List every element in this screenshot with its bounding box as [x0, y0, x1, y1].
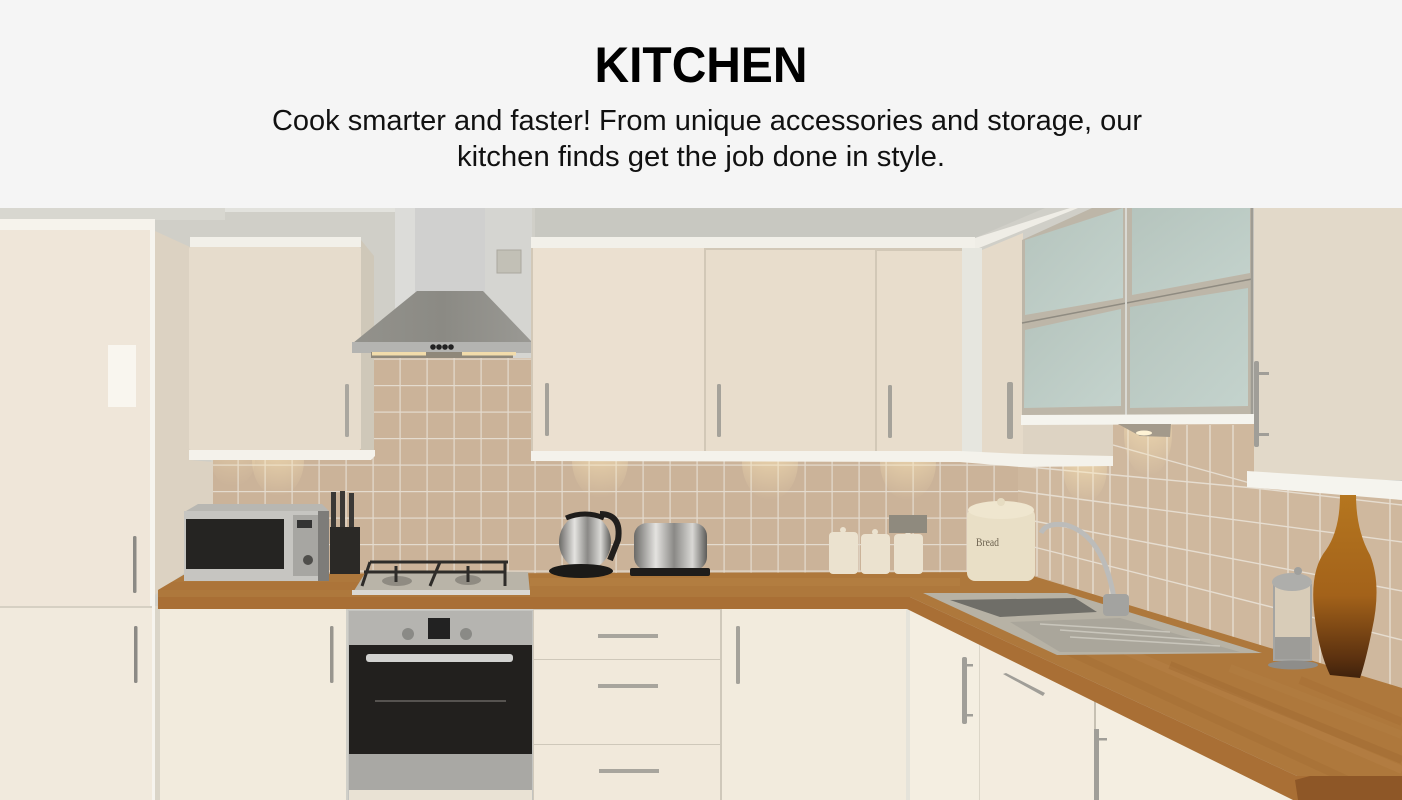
extractor hood: [352, 208, 533, 358]
lower cabinets: [155, 605, 1302, 800]
title: KITCHEN: [594, 37, 808, 93]
gas hob: [352, 562, 530, 595]
back wall tiles: [213, 358, 1023, 576]
oven: [348, 610, 533, 800]
amber vase: [1313, 495, 1377, 678]
header band: [0, 0, 1402, 208]
upper cabinet left: [189, 237, 375, 460]
wall and ceiling: [0, 208, 1402, 800]
subtitle text: [272, 105, 1142, 173]
toaster: [630, 523, 710, 576]
under-cabinet light glows: [211, 392, 1172, 502]
sink: [923, 593, 1262, 655]
countertop: [158, 572, 1402, 800]
bread bin: Bread: [976, 535, 999, 549]
tap: [1041, 524, 1129, 616]
socket on tiles: [889, 515, 927, 533]
kitchen photo illustration: [0, 208, 1402, 800]
bread bin: [967, 498, 1035, 581]
right upper cabinet: [1247, 208, 1402, 500]
side wall tiles: [1018, 424, 1402, 690]
kettle: [549, 514, 619, 578]
subtitle text: kitchen finds get the job done in style.: [457, 141, 945, 173]
subtitle text: Cook smarter and faster! From unique accessories and storage, our: [272, 105, 1142, 137]
tall fridge unit: [0, 219, 213, 800]
glass wall cabinet: [1021, 208, 1254, 437]
microwave: [184, 504, 329, 581]
grates: [362, 562, 508, 586]
knife block: [330, 491, 360, 574]
cafetiere: [1268, 567, 1318, 670]
upper cabinets centre: [531, 208, 1113, 467]
wall socket: [497, 250, 521, 273]
glass panes: [1024, 208, 1250, 408]
storage canisters: [829, 527, 923, 574]
